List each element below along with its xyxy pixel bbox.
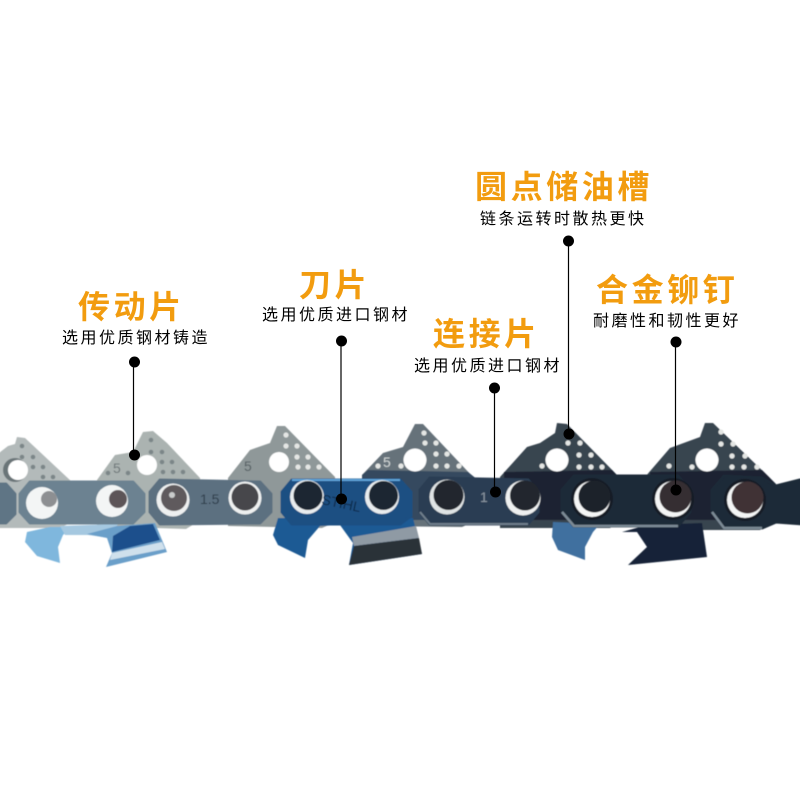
stamped marks: 1 bbox=[480, 489, 488, 505]
callout: 连接片: 选用优质进口钢材 bbox=[414, 357, 562, 375]
callout: 传动片: 传动片 bbox=[78, 289, 185, 325]
callout: 刀片 bbox=[262, 267, 410, 504]
cutter: dark bbox=[552, 522, 707, 565]
stamped marks: 5 bbox=[113, 460, 121, 476]
chain links bbox=[0, 476, 800, 528]
stamped marks: STIHL bbox=[320, 491, 363, 515]
callout: 传动片 bbox=[62, 289, 210, 460]
callout: 刀片: 刀片 bbox=[299, 267, 370, 303]
callout: 圆点储油槽: 圆点储油槽 bbox=[475, 169, 653, 205]
rivets bbox=[26, 478, 766, 521]
cutter: blue bbox=[273, 518, 422, 565]
callout: 圆点储油槽 bbox=[475, 169, 653, 440]
callout: 合金铆钉 bbox=[593, 272, 741, 496]
callout: 连接片 bbox=[414, 316, 562, 498]
stamped marks: 5 bbox=[383, 454, 391, 470]
stamped marks: 5 bbox=[244, 458, 252, 474]
callout: 传动片: 选用优质钢材铸造 bbox=[62, 329, 210, 347]
cutter: light blue bbox=[25, 523, 167, 567]
callout: 刀片: 选用优质进口钢材 bbox=[262, 306, 410, 324]
chain photo illustration bbox=[0, 423, 800, 567]
callout: 连接片: 连接片 bbox=[433, 316, 540, 352]
callout: 合金铆钉: 合金铆钉 bbox=[596, 272, 738, 308]
callout: 合金铆钉: 耐磨性和韧性更好 bbox=[593, 312, 741, 330]
stamped marks bbox=[113, 454, 488, 515]
tooth plates bbox=[0, 423, 776, 530]
callout: 圆点储油槽: 链条运转时散热更快 bbox=[480, 210, 647, 228]
stamped marks: 1.5 bbox=[200, 491, 220, 507]
